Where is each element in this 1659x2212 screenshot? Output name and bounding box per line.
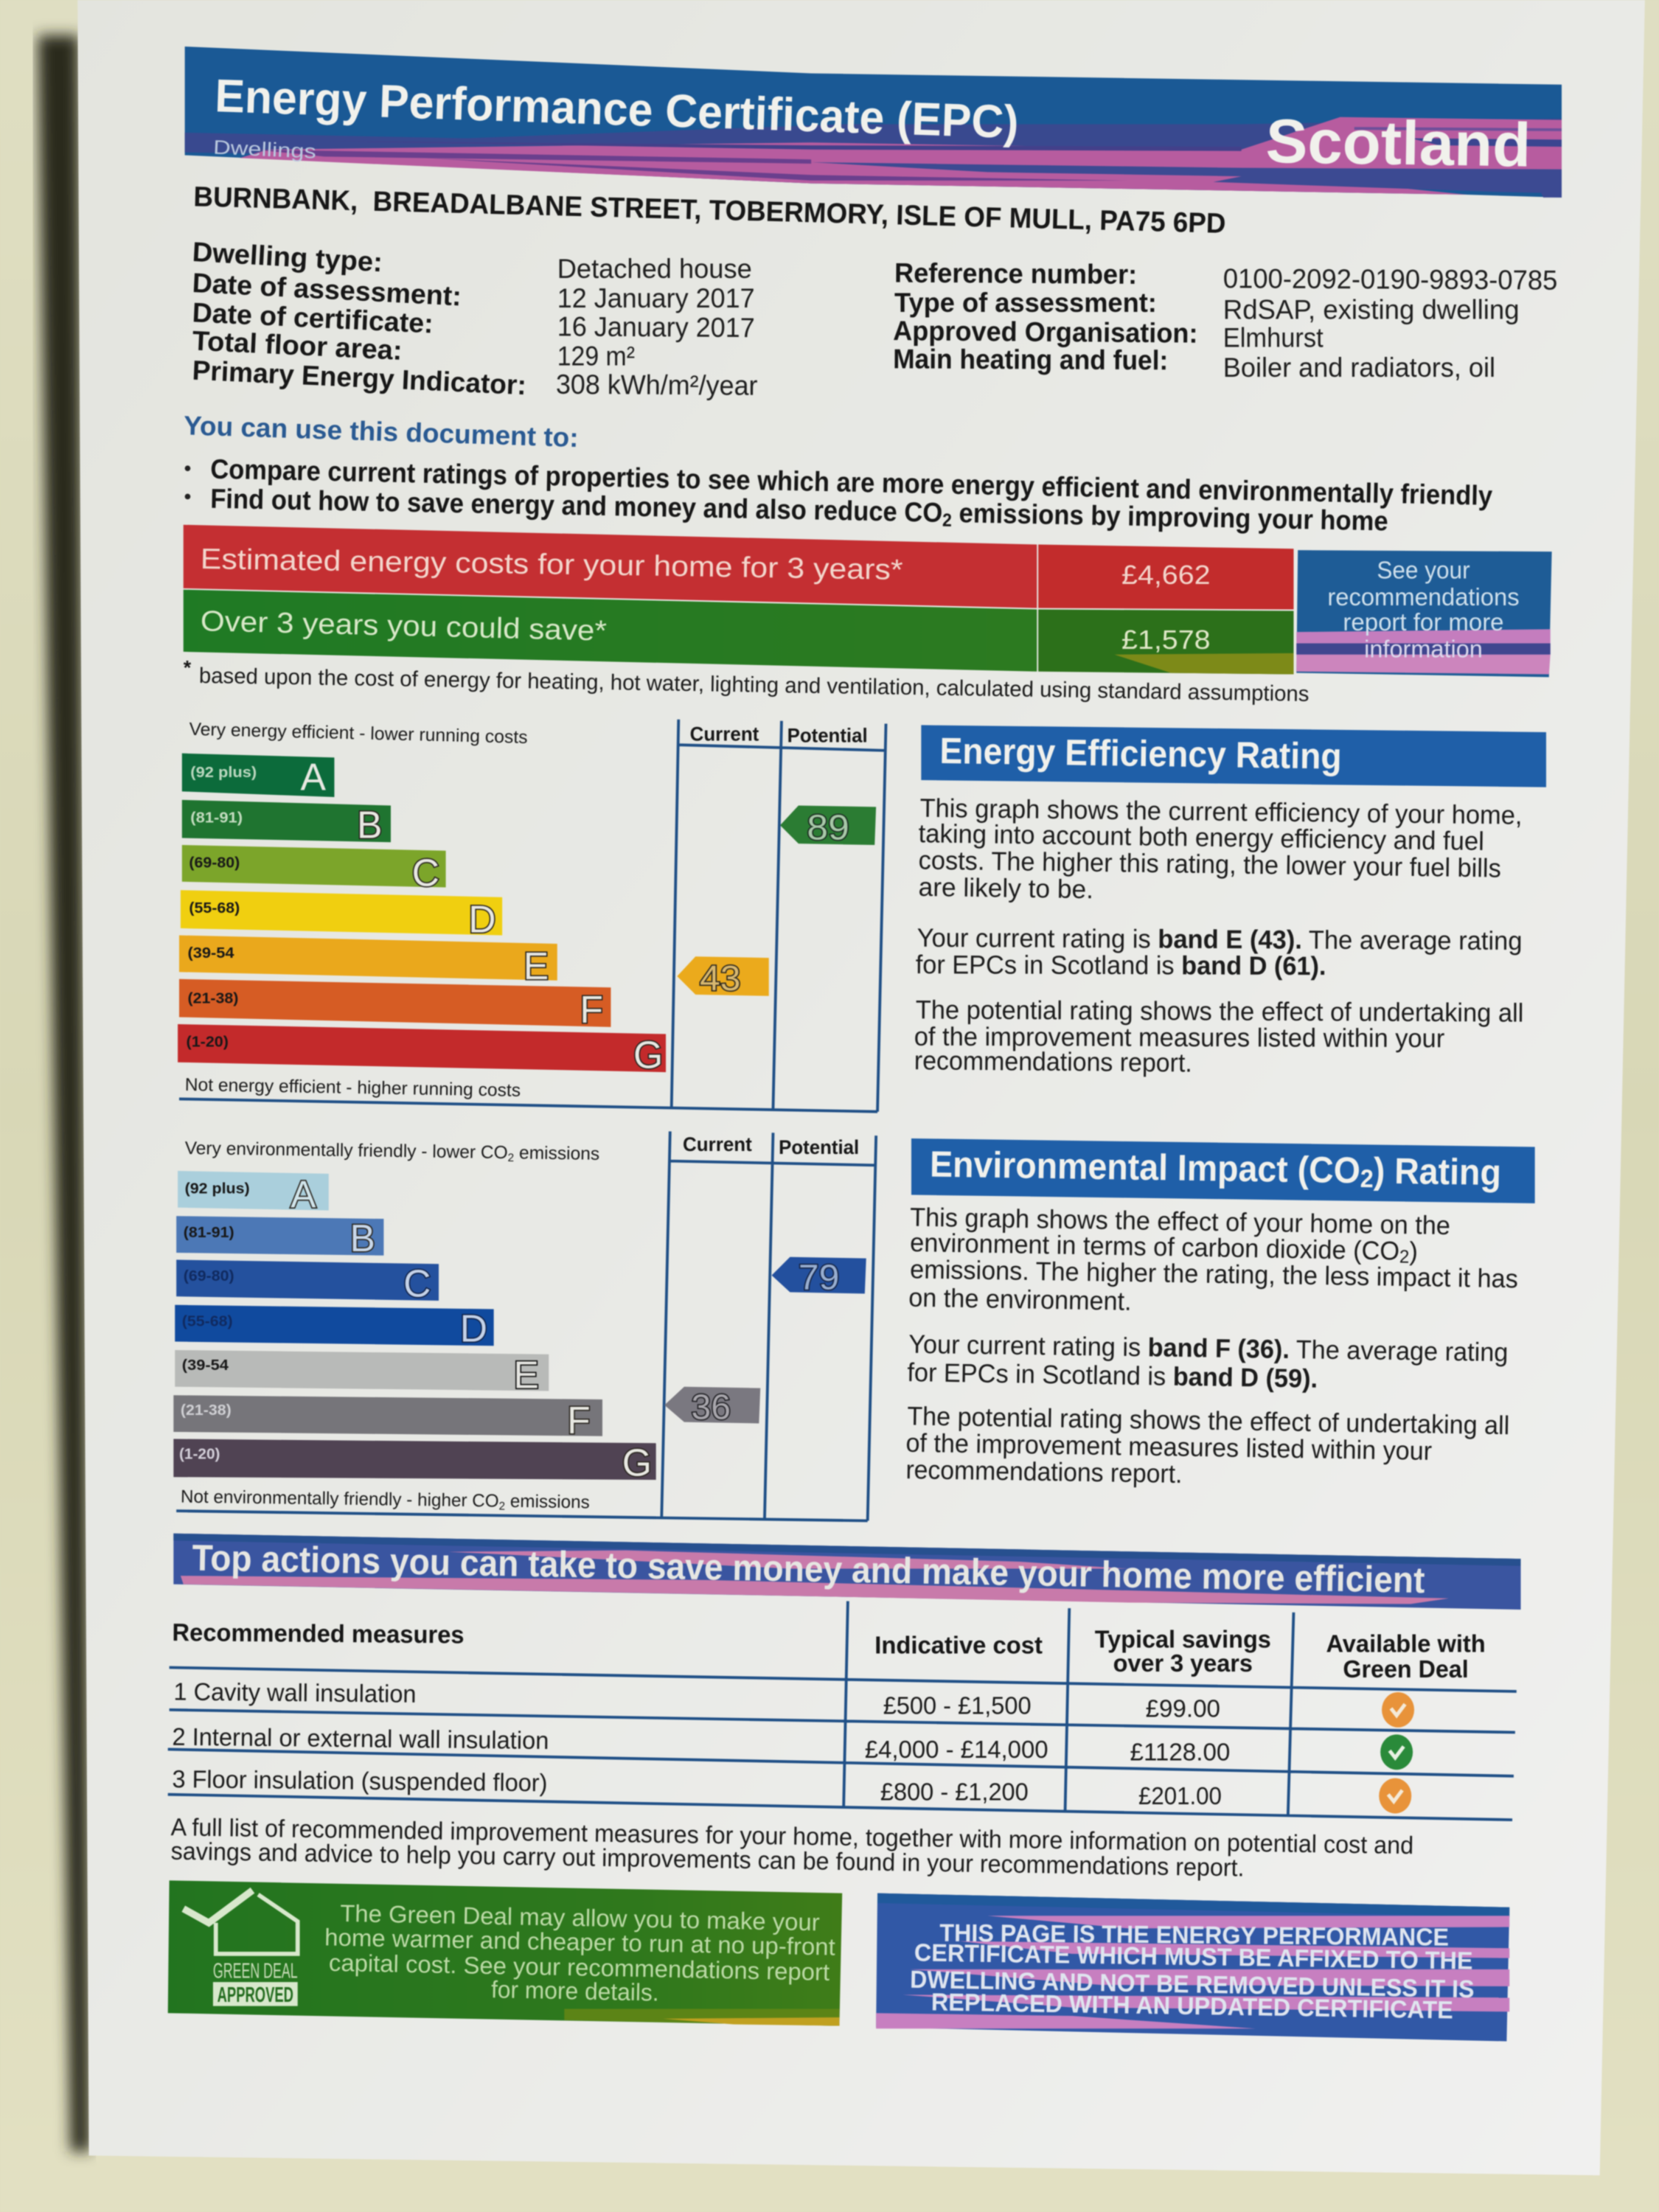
dwelling details: Primary Energy Indicator: [192,355,527,400]
improvement note: savings and advice to help you carry out improvements can be found in your recommendations report. [170,1838,1245,1882]
band A: (92 plus) [190,765,257,781]
energy rating text: are likely to be. [918,873,1093,904]
potential marker 89: 89 [807,808,849,847]
band E [175,1350,549,1397]
top actions heading: Top actions you can take to save money and make your home more efficient [192,1537,1425,1601]
band G [173,1439,656,1484]
assessment details: 0100-2092-0190-9893-0785 [1223,262,1557,296]
title: Energy Performance Certificate (EPC) [214,70,1020,148]
current marker 43: 43 [700,959,740,998]
green deal panel: home warmer and cheaper to run at no up-front [324,1924,835,1961]
recommended measures table: Recommended measures [172,1619,465,1649]
energy cost banner: £4,662 [1121,560,1211,590]
usage heading: You can use this document to: [183,410,579,453]
potential marker 89 [780,805,876,847]
band D [175,1305,494,1350]
dwelling details: Date of assessment: [192,267,462,312]
row 1: £99.00 [1146,1695,1220,1722]
dwelling details: Total floor area: [192,325,403,366]
band C [182,845,446,894]
improvement note [170,1814,1413,1882]
band G: G [633,1033,663,1076]
environmental impact chart: Very environmentally friendly - lower CO [185,1138,507,1163]
band B [182,800,391,846]
environmental rating heading: 2 [1360,1165,1374,1193]
assessment details: Main heating and fuel: [893,343,1168,375]
recommendations callout: information [1364,636,1483,664]
improvement note: A full list of recommended improvement measures for your home, together with more information on potential cost and [170,1814,1413,1860]
recommended measures table: Indicative cost [874,1632,1043,1659]
title band [185,46,1562,198]
band G: G [622,1441,652,1484]
dwelling details: Date of certificate: [192,296,434,339]
potential marker 79 [772,1257,866,1298]
icon: green deal house: GREEN DEAL [213,1959,298,1983]
row 1: £500 - £1,500 [883,1693,1032,1720]
energy cost banner: Estimated energy costs for your home for 3 years* [201,543,903,586]
dwelling details: 12 January 2017 [557,282,755,313]
energy rating text: Your current rating is band E (43). The average rating [917,924,1523,956]
band C [176,1260,439,1304]
environmental rating text: recommendations report. [905,1455,1183,1489]
energy efficiency chart: Potential [787,724,868,746]
row 2: £1128.00 [1130,1739,1230,1767]
row 1 [173,1678,1414,1728]
band A: (92 plus) [185,1181,250,1197]
energy cost banner: Over 3 years you could save* [200,605,607,647]
assessment details: Type of assessment: [894,287,1157,318]
environmental rating text [905,1203,1518,1489]
recommendations callout: See your [1377,557,1470,584]
current marker 36 [664,1387,760,1427]
assessment details: Reference number: [894,257,1137,290]
current marker 36: 36 [691,1388,731,1427]
environmental rating heading: Environmental Impact (CO [930,1144,1391,1192]
environmental impact chart: 2 [507,1152,514,1164]
band F: (21-38) [187,990,238,1006]
potential marker 79: 79 [799,1259,839,1298]
environmental impact chart: Current [683,1133,752,1155]
energy rating text: This graph shows the current efficiency of your home, [919,794,1523,830]
environmental rating text: 2 [1399,1246,1410,1267]
usage bullets: 2 [942,510,952,531]
band F: F [580,988,603,1031]
energy efficiency chart: Not energy efficient - higher running costs [185,1075,521,1101]
environmental rating text: for EPCs in Scotland is band D (59). [907,1358,1318,1394]
certificate notice panel: CERTIFICATE WHICH MUST BE AFFIXED TO THE [914,1939,1473,1975]
environmental rating text: on the environment. [908,1284,1132,1316]
recommended measures table: Available with [1326,1630,1486,1658]
band B: (81-91) [184,1225,234,1241]
band E: E [524,945,549,987]
band A [178,1171,329,1216]
band D: D [468,898,496,941]
address: BURNBANK, BREADALBANE STREET, TOBERMORY, ISLE OF MULL, PA75 6PD [193,181,1226,240]
band F: F [567,1399,591,1441]
energy rating text: The potential rating shows the effect of undertaking all [916,995,1523,1028]
recommended measures table [168,1601,1517,1820]
energy cost banner [184,525,1293,675]
band C: C [403,1262,431,1304]
footnote: based upon the cost of energy for heating, hot water, lighting and ventilation, calculated using standard assumptions [199,664,1310,706]
environmental rating text: of the improvement measures listed within your [905,1429,1433,1466]
band C: (69-80) [184,1268,234,1284]
green deal panel [168,1880,842,2025]
environmental impact chart [173,1131,876,1520]
environmental rating text: environment in terms of carbon dioxide (CO [910,1228,1415,1266]
band A [182,754,334,798]
country: Scotland [1265,106,1531,180]
environmental impact chart: Potential [779,1136,859,1158]
energy efficiency chart [178,720,886,1112]
environmental rating text: Your current rating is band F (36). The average rating [908,1330,1509,1367]
environmental impact chart: emissions [505,1492,590,1512]
current marker 43 [677,956,769,998]
icon: green deal house: APPROVED [218,1983,293,2007]
assessment details: Approved Organisation: [893,315,1198,349]
row 3: 3 Floor insulation (suspended floor) [172,1766,548,1797]
green deal panel: capital cost. See your recommendations report [329,1950,830,1986]
environmental rating heading [911,1138,1535,1203]
energy rating heading [921,725,1546,787]
band G [178,1024,666,1076]
environmental impact chart: 2 [498,1500,505,1513]
usage bullets: emissions by improving your home [952,497,1388,536]
assessment details: Elmhurst [1223,322,1324,353]
recommendations callout [1296,550,1552,677]
dwelling details: Detached house [557,253,752,284]
band C: C [412,852,439,894]
band B: B [349,1217,375,1259]
band D: D [460,1307,487,1350]
band E: (39-54 [187,945,234,961]
band F [173,1395,602,1441]
recommended measures table: Green Deal [1343,1656,1469,1683]
assessment details: RdSAP, existing dwelling [1223,293,1520,324]
energy efficiency chart: Very energy efficient - lower running costs [189,720,528,748]
row 3: £201.00 [1138,1783,1222,1810]
band G: (1-20) [179,1446,220,1462]
energy efficiency chart: Current [690,723,759,745]
green deal panel: The Green Deal may allow you to make your [340,1900,820,1935]
assessment details [893,257,1557,383]
band E [179,935,557,987]
row 2 [172,1724,1413,1770]
energy rating text: taking into account both energy efficiency and fuel [918,819,1484,856]
certificate notice panel: THIS PAGE IS THE ENERGY PERFORMANCE [939,1920,1449,1952]
energy rating text [914,794,1523,1078]
band B: (81-91) [190,810,243,826]
energy rating text: for EPCs in Scotland is band D (61). [916,950,1326,981]
row 2: £4,000 - £14,000 [865,1736,1048,1764]
recommendations callout: recommendations [1327,584,1520,611]
band B: B [357,803,383,846]
band E: (39-54 [182,1357,229,1374]
energy rating text: of the improvement measures listed within your [914,1023,1445,1053]
band D: (55-68) [189,900,240,917]
certificate notice panel: DWELLING AND NOT BE REMOVED UNLESS IT IS [910,1966,1475,2003]
subtitle: Dwellings [213,136,316,163]
paper shadow [38,35,90,2152]
recommendations callout: report for more [1343,609,1504,636]
environmental rating text: emissions. The higher the rating, the less impact it has [910,1255,1518,1293]
environmental rating text: This graph shows the effect of your home on the [910,1203,1450,1240]
band A: A [301,755,327,798]
band D: (55-68) [182,1313,233,1329]
environmental rating text: The potential rating shows the effect of undertaking all [907,1402,1510,1440]
dwelling details: 16 January 2017 [557,310,755,343]
assessment details: Boiler and radiators, oil [1223,352,1495,383]
band E: E [513,1354,539,1397]
band F: (21-38) [181,1402,232,1419]
usage bullets [185,453,1493,539]
environmental impact chart: Not environmentally friendly - higher CO [181,1487,501,1512]
environmental rating text: ) [1409,1237,1418,1266]
energy rating heading: Energy Efficiency Rating [939,730,1342,777]
row 3 [172,1766,1411,1814]
band A: A [291,1173,316,1216]
certificate notice panel: REPLACED WITH AN UPDATED CERTIFICATE [931,1989,1453,2025]
band C: (69-80) [189,855,240,872]
dwelling details [192,236,758,401]
dwelling details: 129 m² [557,341,635,372]
dwelling details: 308 kWh/m²/year [556,369,758,401]
band G: (1-20) [187,1034,229,1051]
band B [176,1216,383,1259]
environmental impact chart: emissions [514,1143,599,1164]
certificate notice panel [876,1893,1509,2041]
row 2: 2 Internal or external wall insulation [172,1724,549,1755]
usage bullets: Find out how to save energy and money and also reduce CO [210,483,1001,529]
recommended measures table: over 3 years [1113,1650,1253,1677]
icon: green deal house [184,1891,298,2007]
energy rating text: costs. The higher this rating, the lower your fuel bills [918,846,1501,883]
dwelling details: Dwelling type: [192,236,383,277]
recommended measures table: Typical savings [1095,1627,1271,1654]
footnote: * [184,657,192,679]
band D [181,890,502,941]
row 3: £800 - £1,200 [880,1778,1029,1806]
band F [179,979,611,1031]
energy cost banner: £1,578 [1121,625,1211,655]
row 1: 1 Cavity wall insulation [173,1678,417,1708]
green deal panel: for more details. [491,1976,659,2006]
energy rating text: recommendations report. [914,1046,1192,1078]
environmental rating heading: ) Rating [1373,1150,1501,1193]
usage bullets: Compare current ratings of properties to see which are more energy efficient and environmentally friendly [210,453,1493,511]
